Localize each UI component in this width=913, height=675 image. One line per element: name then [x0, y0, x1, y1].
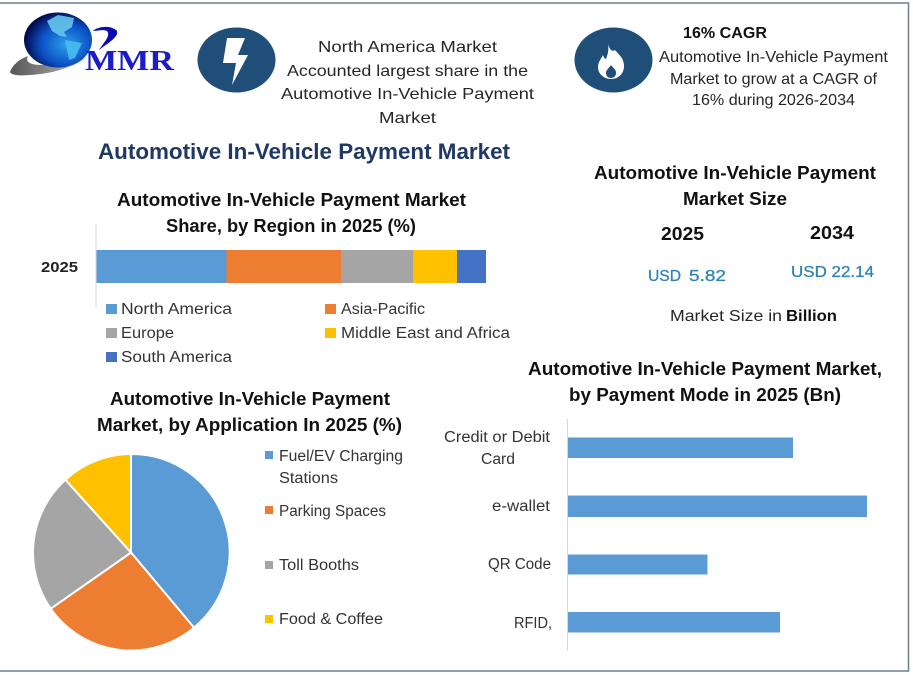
market size unit note: Market Size in [670, 308, 782, 325]
bar chart: payment mode: RFID, [514, 615, 552, 632]
heading: by payment mode [528, 359, 882, 405]
legend: application share [265, 448, 403, 628]
market size: 2034 value: 2034 [810, 223, 854, 243]
market size: 2025 value: USD [648, 268, 681, 285]
legend: region share [106, 301, 510, 366]
market size unit note: Billion [786, 308, 837, 325]
legend: region share: South America [121, 349, 232, 366]
text block: regional callout [281, 39, 535, 127]
legend: application share: Parking Spaces [279, 503, 386, 520]
legend: region share: Asia-Pacific [341, 301, 425, 318]
icon: flame [574, 28, 652, 92]
legend: region share: North America [121, 301, 232, 318]
bar chart: payment mode: Card [481, 451, 515, 468]
legend: region share: Europe [121, 325, 174, 342]
legend: application share: Fuel/EV Charging [279, 448, 403, 465]
legend: region share: Middle East and Africa [341, 325, 510, 342]
heading: by payment mode: Automotive In-Vehicle Payment Market, [528, 359, 882, 379]
stacked bar chart: region share [41, 224, 486, 308]
legend: application share: Food & Coffee [279, 611, 383, 628]
bar chart: payment mode [444, 419, 867, 651]
text block: CAGR callout: Market to grow at a CAGR of [670, 71, 878, 88]
text block: CAGR callout: Automotive In-Vehicle Payment [659, 49, 889, 66]
stacked bar chart: region share: 2025 [41, 260, 78, 276]
market size: 2025 value: 2025 [661, 224, 704, 244]
bar chart: payment mode: e-wallet [492, 498, 551, 515]
heading: share by region: Share, by Region in 2025 (%) [166, 216, 416, 236]
market size: 2025 value [648, 224, 726, 285]
text block: regional callout: Automotive In-Vehicle Payment [281, 86, 535, 103]
text block: CAGR callout: 16% during 2026-2034 [692, 92, 855, 109]
heading: market size: Market Size [683, 189, 787, 209]
heading: share by region [117, 190, 466, 236]
heading: by application: Automotive In-Vehicle Payment [110, 389, 390, 409]
pie chart: application share [33, 454, 230, 651]
heading: by application [97, 389, 402, 435]
text block: regional callout: North America Market [318, 39, 498, 56]
icon: lightning bolt [198, 28, 276, 92]
legend: application share: Toll Booths [279, 557, 359, 574]
market size: 2034 value: USD 22.14 [791, 264, 874, 281]
heading: share by region: Automotive In-Vehicle Payment Market [117, 190, 466, 210]
icon: MMR logo [10, 12, 175, 77]
legend: application share: Stations [279, 470, 338, 487]
text block: CAGR callout: 16% CAGR [683, 25, 767, 42]
market size: 2034 value [791, 223, 874, 281]
heading: market size [594, 163, 876, 209]
heading: by payment mode: by Payment Mode in 2025 (Bn) [569, 385, 841, 405]
text block: regional callout: Market [379, 110, 437, 127]
heading: market size: Automotive In-Vehicle Payment [594, 163, 876, 183]
title: Automotive In-Vehicle Payment Market [98, 139, 511, 164]
bar chart: payment mode: Credit or Debit [444, 429, 551, 446]
heading: by application: Market, by Application In 2025 (%) [97, 415, 402, 435]
text block: regional callout: Accounted largest share in the [287, 63, 528, 80]
bar chart: payment mode: QR Code [488, 556, 551, 573]
market size: 2025 value: 5.82 [689, 268, 726, 285]
text block: CAGR callout [659, 25, 889, 109]
icon: MMR logo: MMR [85, 46, 175, 77]
